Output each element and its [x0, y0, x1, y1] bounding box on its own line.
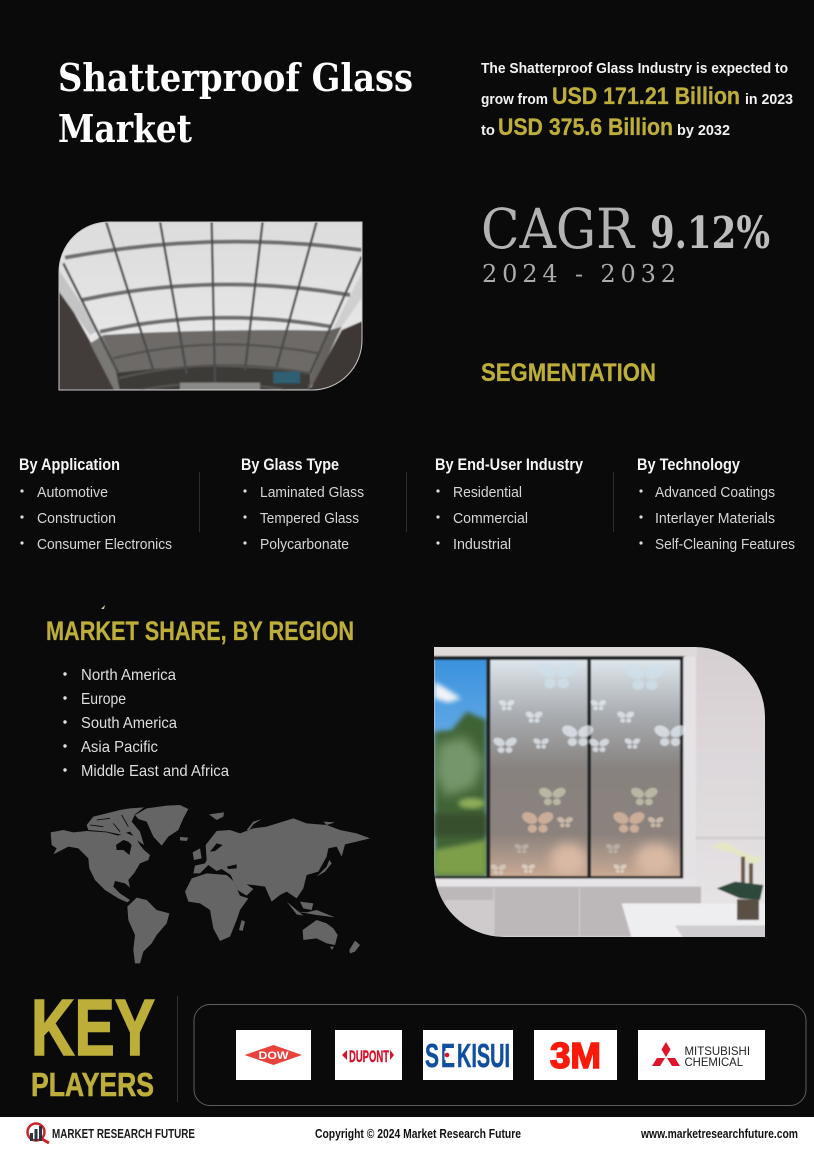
logo: Dow [236, 1030, 311, 1080]
market size summary [481, 60, 793, 141]
market size summary: grow from [481, 91, 548, 108]
region list: North America [81, 667, 176, 684]
column: by technology: Self-Cleaning Features [655, 536, 795, 553]
column: by technology [637, 455, 795, 553]
market size summary: to [481, 122, 495, 139]
region list: Middle East and Africa [81, 763, 229, 780]
column: by end-user industry: By End-User Industry [435, 455, 583, 474]
column: by technology: By Technology [637, 455, 740, 474]
copyright: Copyright © 2024 Market Research Future [315, 1127, 521, 1141]
column: by technology: Advanced Coatings [655, 484, 775, 501]
market size summary: USD 171.21 Billion [552, 83, 740, 110]
logo: Sekisui: E [441, 1037, 455, 1074]
logo: Sekisui [423, 1030, 513, 1080]
column: by application: Construction [37, 510, 116, 527]
column: by glass type: Tempered Glass [260, 510, 359, 527]
market size summary: by 2032 [677, 122, 730, 139]
column: by application: Automotive [37, 484, 108, 501]
market size summary: The Shatterproof Glass Industry is expected to [481, 60, 788, 77]
title: Market [58, 106, 192, 151]
CAGR: 2024 - 2032 [482, 260, 676, 288]
logo: Mitsubishi Chemical [638, 1030, 765, 1080]
market size summary: in 2023 [745, 91, 793, 108]
logo: Mitsubishi Chemical: MITSUBISHI [684, 1044, 750, 1058]
column: by glass type [241, 455, 364, 553]
logo: Dow: DOW [258, 1050, 289, 1062]
title [58, 55, 413, 151]
logo: DuPont [335, 1030, 402, 1080]
column: by end-user industry: Commercial [453, 510, 528, 527]
logo: Mitsubishi Chemical: CHEMICAL [684, 1055, 743, 1069]
segmentation heading: SEGMENTATION [481, 359, 656, 387]
column: by end-user industry [435, 455, 583, 553]
column: by application: By Application [19, 455, 120, 474]
column: by end-user industry: Industrial [453, 536, 511, 553]
column: by glass type: By Glass Type [241, 455, 339, 474]
key players heading [31, 983, 155, 1103]
region list: South America [81, 715, 177, 732]
region list: Europe [81, 691, 126, 708]
CAGR: 9.12% [650, 208, 770, 259]
logo: Sekisui: KISUI [457, 1037, 510, 1074]
region list [63, 667, 229, 780]
column: by end-user industry: Residential [453, 484, 522, 501]
icon: market research future [28, 1124, 49, 1143]
logo: 3M [534, 1030, 617, 1080]
key players panel [194, 1004, 806, 1106]
title: Shatterproof Glass [58, 55, 413, 100]
column: by glass type: Laminated Glass [260, 484, 364, 501]
CAGR: CAGR [481, 197, 635, 261]
CAGR [481, 197, 770, 288]
brand name: MARKET RESEARCH FUTURE [52, 1126, 195, 1141]
logo: Sekisui: S [425, 1037, 439, 1074]
region list: Asia Pacific [81, 739, 158, 756]
logo: 3M: 3M [550, 1035, 601, 1076]
image: glass roof [57, 220, 365, 393]
market share heading: MARKET SHARE, BY REGION [46, 616, 354, 646]
column: by application [19, 455, 172, 553]
logo: DuPont: DUPONT [349, 1048, 389, 1066]
key players heading: KEY [31, 983, 155, 1072]
market size summary: USD 375.6 Billion [498, 114, 673, 141]
column: by technology: Interlayer Materials [655, 510, 775, 527]
image: frosted butterfly window [432, 645, 768, 938]
column: by glass type: Polycarbonate [260, 536, 349, 553]
world map [51, 805, 370, 963]
column: by application: Consumer Electronics [37, 536, 172, 553]
footer [0, 1117, 814, 1150]
key players heading: PLAYERS [31, 1066, 154, 1103]
